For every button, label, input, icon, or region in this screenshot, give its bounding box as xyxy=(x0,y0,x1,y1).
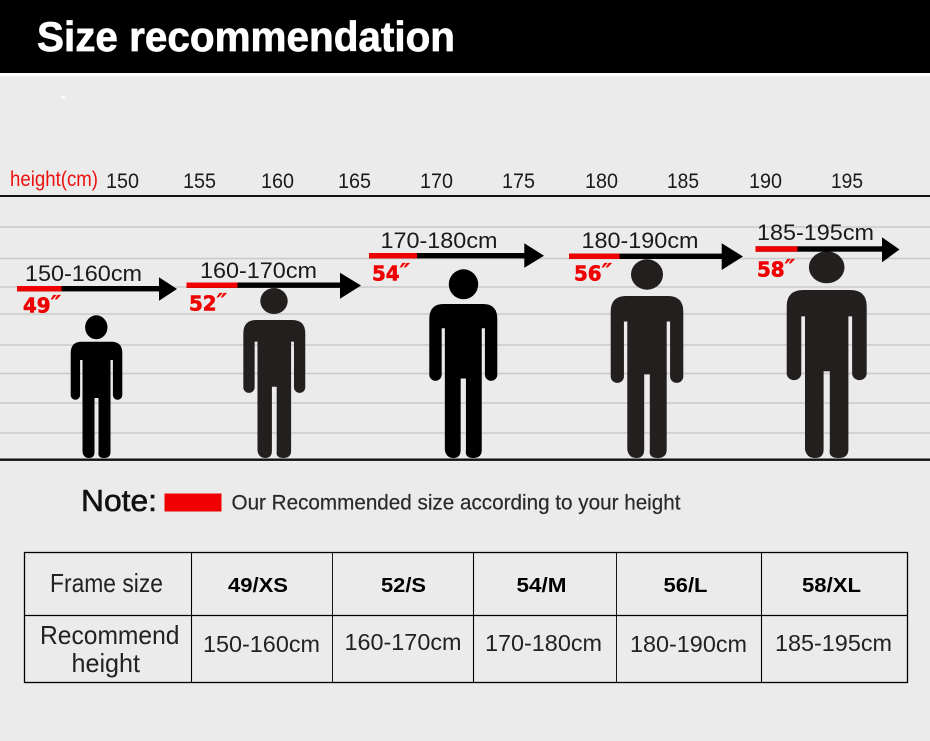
height axis labels: 160 xyxy=(261,169,294,193)
range marker: 49 inch: 150-160cm xyxy=(25,261,142,286)
height axis labels: 190 xyxy=(749,169,782,193)
height axis labels: 185 xyxy=(667,169,699,193)
row: recommend height xyxy=(40,620,892,678)
row: frame size: 56/L xyxy=(664,574,708,597)
arrow xyxy=(17,277,177,301)
arrow xyxy=(569,243,743,270)
header band xyxy=(0,0,930,73)
height axis labels xyxy=(10,167,863,193)
figure: 185-195cm person xyxy=(787,251,867,458)
range marker: 54 inch: 54″ xyxy=(372,258,410,286)
size table xyxy=(24,552,908,683)
row: frame size: 52/S xyxy=(381,574,426,597)
row: recommend height: 170-180cm xyxy=(485,630,602,656)
figure: 170-180cm person xyxy=(429,269,497,458)
range marker: 52 inch xyxy=(186,258,361,316)
range marker: 58 inch: 185-195cm xyxy=(757,220,874,245)
range marker: 49 inch: 49″ xyxy=(23,290,61,318)
row: recommend height: height xyxy=(72,648,141,678)
height axis labels: 175 xyxy=(502,169,535,193)
range marker: 58 inch: 58″ xyxy=(757,254,795,282)
height axis labels: 155 xyxy=(183,169,216,193)
row: frame size xyxy=(50,568,861,598)
range marker: 52 inch: 160-170cm xyxy=(200,258,317,283)
row: recommend height: 180-190cm xyxy=(630,631,747,657)
title: Size recommendation xyxy=(37,13,455,60)
range marker: 54 inch: 170-180cm xyxy=(380,228,498,253)
height axis labels: 170 xyxy=(420,169,453,193)
row: recommend height: 160-170cm xyxy=(344,629,462,655)
height axis labels: 150 xyxy=(106,169,139,193)
row: recommend height: 150-160cm xyxy=(203,631,320,657)
range marker: 56 inch: 180-190cm xyxy=(582,228,698,253)
row: frame size: Frame size xyxy=(50,568,163,598)
row: recommend height: 185-195cm xyxy=(775,630,892,656)
height axis labels: 165 xyxy=(338,169,371,193)
row: frame size: 49/XS xyxy=(228,574,288,597)
range marker: 56 inch xyxy=(569,228,743,286)
row: frame size: 54/M xyxy=(516,574,566,597)
range marker: 52 inch: 52″ xyxy=(189,288,227,316)
arrow xyxy=(186,273,361,299)
range marker: 58 inch xyxy=(756,220,900,282)
red swatch xyxy=(164,494,222,512)
note legend: Note: xyxy=(81,483,157,518)
row: recommend height: Recommend xyxy=(40,620,180,650)
range marker: 56 inch: 56″ xyxy=(574,258,612,286)
figure: 180-190cm person xyxy=(611,259,683,458)
range marker: 54 inch xyxy=(369,228,544,286)
range marker: 49 inch xyxy=(17,261,177,318)
axis title: height(cm) xyxy=(10,167,98,191)
arrow xyxy=(756,237,900,262)
arrow xyxy=(369,243,544,268)
figure: 150-160cm person xyxy=(71,315,122,458)
figure: 160-170cm person xyxy=(243,288,305,458)
height axis labels: 195 xyxy=(831,169,863,193)
note legend xyxy=(81,483,681,518)
row: frame size: 58/XL xyxy=(802,574,861,597)
note legend: Our Recommended size according to your height xyxy=(232,492,681,514)
height axis labels: 180 xyxy=(585,169,618,193)
